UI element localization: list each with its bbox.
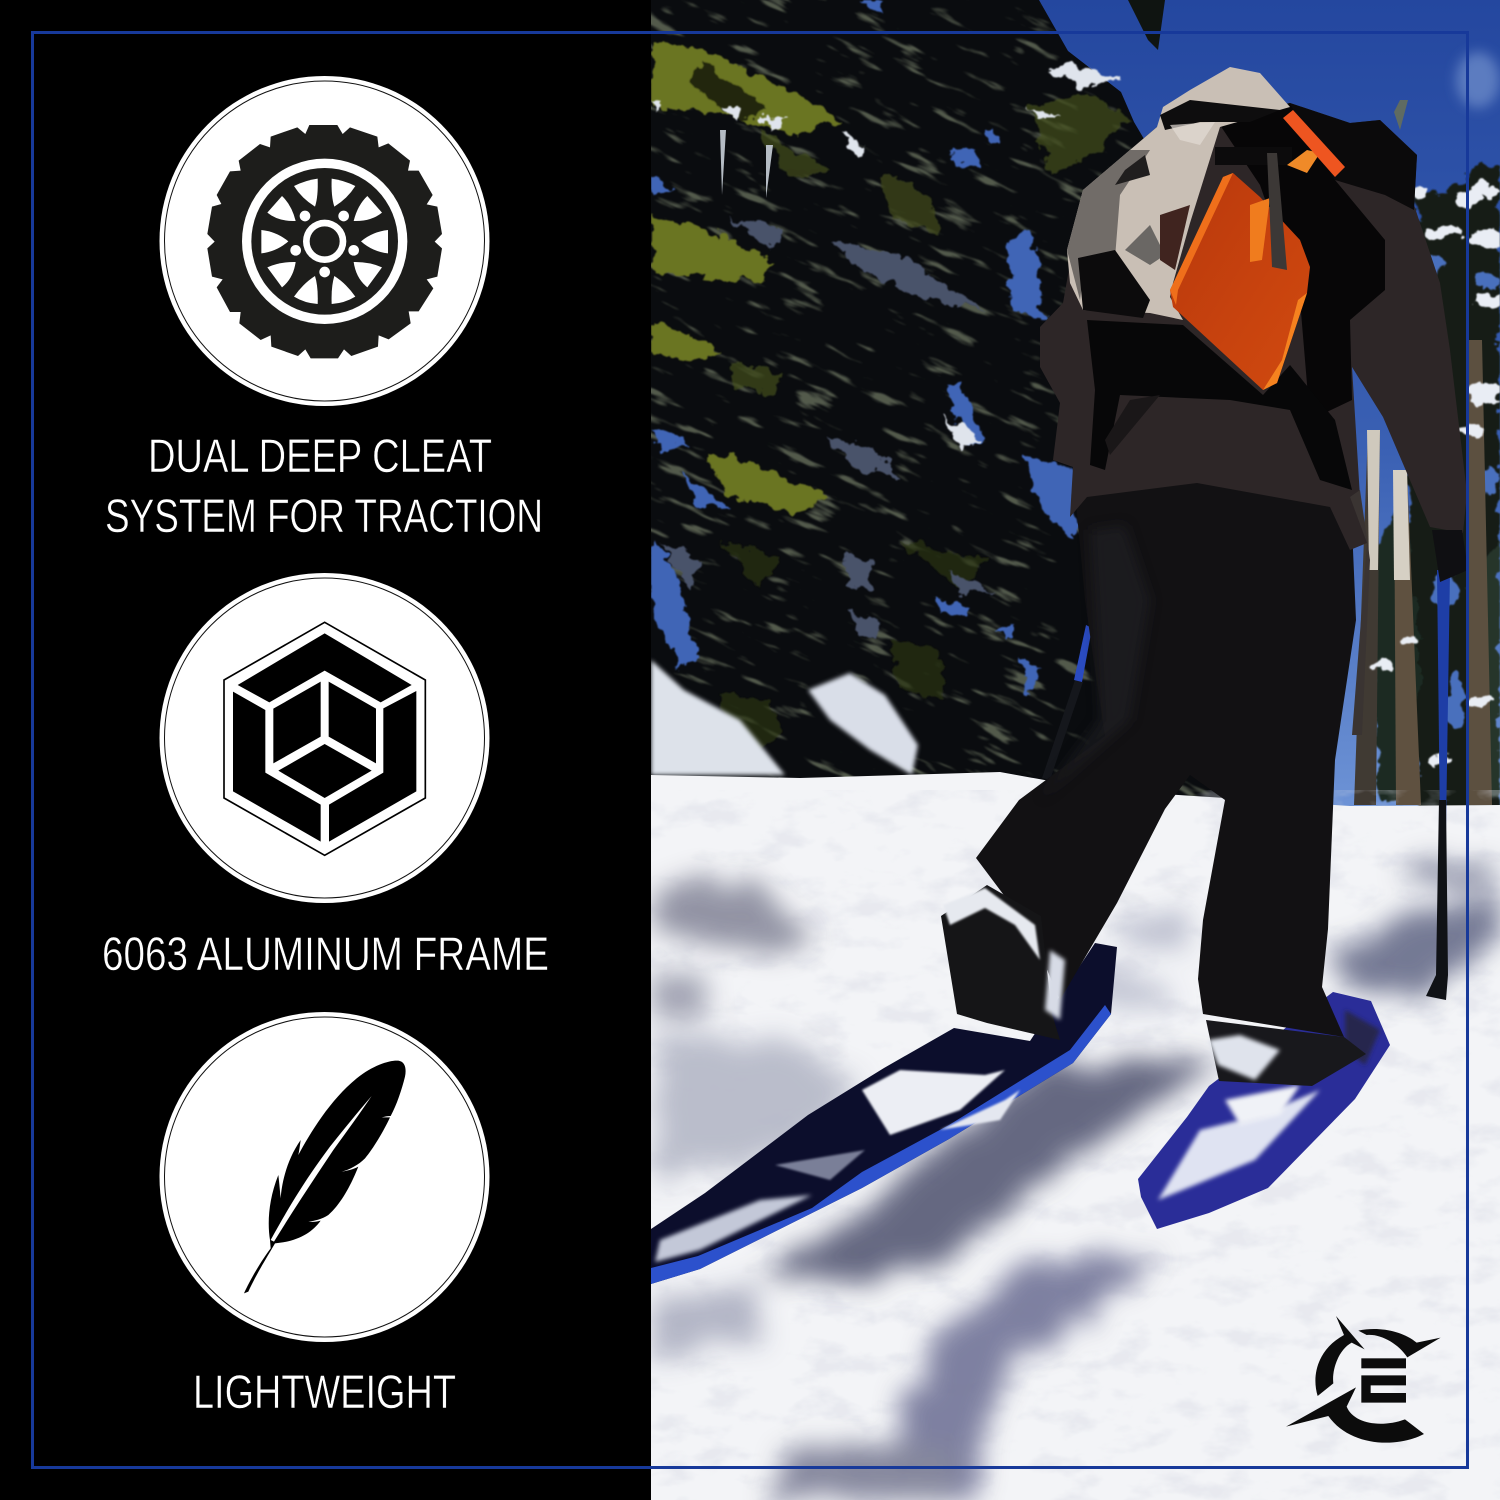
right snowshoe <box>1138 992 1390 1229</box>
harness and hip belt <box>1087 320 1352 490</box>
sky between branches <box>1422 253 1500 730</box>
dark back shadow <box>1220 103 1385 420</box>
icon: feather <box>160 1012 490 1342</box>
left trekking pole <box>1042 625 1092 780</box>
snow slope <box>651 772 1500 1500</box>
left snowshoe <box>651 943 1117 1284</box>
label: lightweight: LIGHTWEIGHT <box>193 1365 456 1418</box>
snow shadows <box>651 862 1500 1500</box>
orange shovel blade <box>1170 173 1310 390</box>
feature 1: cleat system <box>105 76 543 542</box>
right trekking pole <box>1426 570 1450 1000</box>
label: dual deep cleat: SYSTEM FOR TRACTION <box>105 489 543 542</box>
hiker <box>941 67 1468 1086</box>
left boot <box>941 885 1065 1040</box>
feature 2: aluminum frame <box>102 573 549 980</box>
shovel buckle strap <box>1215 147 1292 165</box>
sky <box>1039 0 1500 806</box>
icon: tire <box>160 76 490 406</box>
trousers <box>976 470 1356 1037</box>
tree trunks <box>1354 340 1492 805</box>
sky gaps between branches <box>651 0 1078 697</box>
left black panel <box>0 0 651 1500</box>
background trees at right <box>1354 100 1500 810</box>
photo: snowshoer climbing a snowy slope <box>651 0 1500 1500</box>
black ball on pack top <box>1290 103 1417 210</box>
icon: hexagonal cube <box>160 573 490 903</box>
feature 3: lightweight <box>160 1012 490 1418</box>
green sunlit needles <box>651 42 1128 770</box>
label: 6063 aluminum frame: 6063 ALUMINUM FRAME <box>102 927 549 980</box>
right boot <box>1206 1020 1366 1086</box>
snow on branches <box>651 64 1118 640</box>
snow on right tree <box>1373 184 1500 765</box>
jacket <box>1040 103 1467 550</box>
label: dual deep cleat: DUAL DEEP CLEAT <box>148 429 492 482</box>
backpack <box>1067 67 1290 320</box>
shovel shaft and grip <box>1267 110 1345 270</box>
logo: E mark with swept C <box>1286 1316 1441 1443</box>
pack strap hanging on hip <box>1350 490 1370 735</box>
snow mound on lower branches <box>808 673 918 775</box>
glove <box>1432 530 1468 582</box>
icicles <box>720 130 773 198</box>
label: dual deep cleat <box>105 429 543 542</box>
cloud wisp <box>1456 52 1500 108</box>
conifer tree mass <box>651 0 1222 798</box>
